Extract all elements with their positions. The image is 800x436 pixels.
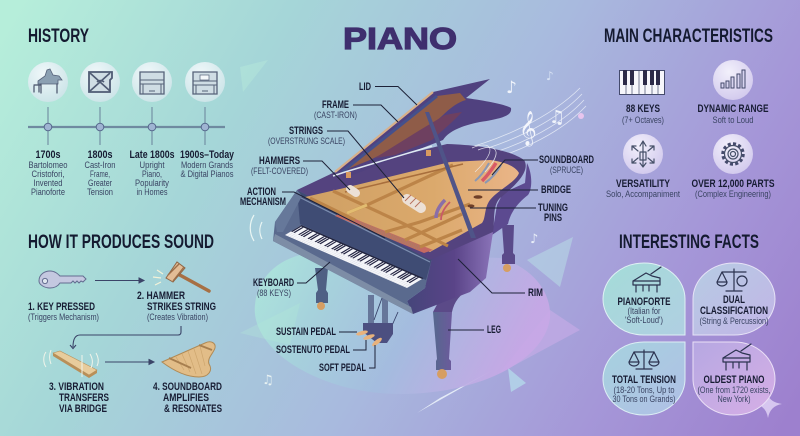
event: 1800s: Tension bbox=[87, 187, 113, 197]
music notes: 𝄞 bbox=[519, 111, 537, 147]
icon: modern piano bbox=[185, 62, 225, 102]
fact: dual classification bbox=[693, 263, 775, 335]
panel: how it produces sound bbox=[28, 231, 222, 415]
fact: total tension: (18-20 Tons, Up to bbox=[614, 385, 674, 395]
music notes: ♪ bbox=[506, 78, 517, 98]
event: late 1800s: Popularity bbox=[135, 178, 169, 188]
characteristic: dynamic range: DYNAMIC RANGE bbox=[698, 103, 768, 115]
label: strings: STRINGS bbox=[289, 125, 323, 137]
fact: oldest piano bbox=[693, 342, 775, 415]
event: late 1800s: Upright bbox=[140, 160, 165, 170]
step 3: VIA BRIDGE bbox=[59, 403, 107, 415]
label: keyboard: KEYBOARD bbox=[253, 277, 294, 289]
characteristic: over 12,000 parts: (Complex Engineering) bbox=[695, 189, 771, 199]
fact: pianoforte bbox=[603, 263, 685, 335]
panel: main characteristics bbox=[604, 25, 774, 199]
fact: pianoforte: PIANOFORTE bbox=[618, 296, 670, 308]
event: 1900s-today bbox=[180, 149, 235, 179]
label: hammers bbox=[251, 155, 350, 190]
characteristic: dynamic range: Soft to Loud bbox=[712, 115, 754, 125]
event: 1800s: Cast-Iron bbox=[84, 160, 116, 170]
event: 1800s: 1800s bbox=[88, 149, 112, 161]
characteristic: over 12,000 parts: OVER 12,000 PARTS bbox=[692, 178, 774, 190]
prop stick bbox=[425, 112, 476, 238]
event: 1700s: 1700s bbox=[36, 149, 60, 161]
event: 1900s-today: & Digital Pianos bbox=[180, 169, 234, 179]
panel: history bbox=[28, 25, 235, 197]
label: strings bbox=[268, 125, 404, 198]
interior details bbox=[310, 145, 501, 253]
event: 1900s-today: Modern Grands bbox=[181, 160, 233, 170]
label: keyboard bbox=[253, 262, 330, 298]
label: sostenuto pedal bbox=[276, 340, 366, 356]
event: 1700s: Bartolomeo bbox=[28, 160, 68, 170]
music notes: ♪ bbox=[530, 232, 538, 247]
rim bbox=[407, 232, 493, 314]
step 2: (Creates Vibration) bbox=[147, 312, 208, 322]
label: hammers: (FELT-COVERED) bbox=[251, 166, 308, 176]
icon: grand piano 1700s bbox=[28, 62, 68, 102]
step 3: 3. VIBRATION bbox=[49, 381, 104, 393]
label: soundboard: (SPRUCE) bbox=[550, 165, 583, 175]
icon: gear bbox=[713, 134, 753, 174]
label: tuning pins: PINS bbox=[544, 212, 562, 224]
label: sustain pedal: SUSTAIN PEDAL bbox=[276, 326, 336, 338]
fact: pianoforte: 'Soft-Loud') bbox=[625, 315, 663, 325]
timeline bbox=[28, 107, 225, 145]
label: rim: RIM bbox=[528, 287, 543, 299]
step 1: 1. KEY PRESSED bbox=[28, 301, 95, 313]
label: lid bbox=[359, 81, 417, 105]
rim side wing bbox=[492, 163, 531, 235]
floor platform bbox=[255, 252, 550, 394]
characteristic: 88 keys: (7+ Octaves) bbox=[622, 115, 664, 125]
label: soundboard: SOUNDBOARD bbox=[539, 154, 594, 166]
step 3: TRANSFERS bbox=[59, 392, 109, 404]
step 3 bbox=[49, 381, 109, 415]
event: late 1800s bbox=[130, 149, 174, 197]
lid bbox=[333, 79, 511, 178]
label: tuning pins bbox=[470, 202, 568, 224]
fact: total tension: TOTAL TENSION bbox=[612, 374, 676, 386]
fact: oldest piano: New York) bbox=[718, 394, 750, 404]
label: hammers: HAMMERS bbox=[259, 155, 300, 167]
step 2 bbox=[137, 290, 216, 322]
step 4: AMPLIFIES bbox=[163, 392, 209, 404]
icon: dynamic range bbox=[713, 60, 753, 100]
label: tuning pins: TUNING bbox=[538, 202, 568, 214]
label: bridge: BRIDGE bbox=[541, 184, 571, 196]
music notes: ♪ bbox=[546, 69, 554, 83]
fact: oldest piano: OLDEST PIANO bbox=[704, 374, 765, 386]
music notes bbox=[262, 69, 586, 388]
label: action mechanism: ACTION bbox=[247, 186, 276, 198]
pedal lyre bbox=[356, 295, 398, 348]
decorative triangle left bbox=[240, 303, 300, 345]
arrow bbox=[95, 278, 144, 283]
label: sostenuto pedal: SOSTENUTO PEDAL bbox=[276, 344, 350, 356]
label: strings: (OVERSTRUNG SCALE) bbox=[268, 136, 345, 146]
fact: dual classification: CLASSIFICATION bbox=[700, 305, 768, 317]
label: frame bbox=[314, 99, 398, 122]
fact: dual classification: DUAL bbox=[723, 294, 745, 306]
label: rim bbox=[458, 259, 543, 299]
label: keyboard: (88 KEYS) bbox=[257, 288, 291, 298]
event: 1900s-today: 1900s–Today bbox=[180, 149, 235, 161]
label: soft pedal bbox=[319, 345, 375, 374]
legs bbox=[315, 225, 515, 379]
fact: total tension bbox=[603, 342, 685, 415]
music notes: ♫ bbox=[549, 107, 565, 128]
label: lid: LID bbox=[359, 81, 371, 93]
event: 1700s: Invented bbox=[34, 178, 62, 188]
label: soft pedal: SOFT PEDAL bbox=[319, 362, 366, 374]
event: 1800s bbox=[84, 149, 116, 197]
event: 1800s: Greater bbox=[88, 178, 112, 188]
heading: history: HISTORY bbox=[28, 25, 89, 47]
fact: pianoforte: (Italian for bbox=[628, 306, 660, 316]
label: leg bbox=[448, 324, 501, 336]
icon: bridge bbox=[44, 350, 98, 378]
icon: cast-iron frame bbox=[80, 62, 120, 102]
characteristic: over 12,000 parts bbox=[692, 178, 774, 199]
arrow bbox=[105, 360, 154, 364]
characteristic: versatility bbox=[606, 178, 680, 199]
label: soundboard bbox=[492, 154, 594, 175]
characteristic: 88 keys: 88 KEYS bbox=[626, 103, 660, 115]
interior soundboard bbox=[305, 160, 519, 252]
step 4: & RESONATES bbox=[164, 403, 222, 415]
icon: soundboard bbox=[162, 342, 215, 377]
characteristic: versatility: Solo, Accompaniment bbox=[606, 189, 680, 199]
step 2: 2. HAMMER bbox=[137, 290, 185, 302]
label: bridge bbox=[468, 184, 571, 196]
icon: upright piano bbox=[132, 62, 172, 102]
step 4 bbox=[153, 381, 222, 415]
piano illustration bbox=[250, 79, 531, 379]
icon: hammer bbox=[153, 262, 209, 291]
fact: oldest piano: (One from 1720 exists, bbox=[698, 385, 770, 395]
characteristic: dynamic range bbox=[698, 103, 768, 125]
characteristic: versatility: VERSATILITY bbox=[616, 178, 670, 190]
case top rim bbox=[297, 144, 526, 260]
fact: total tension: 30 Tons on Grands) bbox=[612, 394, 676, 404]
decorative shapes bbox=[240, 60, 782, 418]
event: late 1800s: Late 1800s bbox=[130, 149, 174, 161]
label: frame: (CAST-IRON) bbox=[314, 110, 357, 120]
vibration arcs bbox=[250, 215, 262, 241]
event: 1700s bbox=[28, 149, 68, 197]
icon: versatility bbox=[623, 134, 663, 174]
label: action mechanism: MECHANISM bbox=[240, 196, 286, 208]
label: frame: FRAME bbox=[322, 99, 349, 111]
label: leg: LEG bbox=[487, 324, 501, 336]
icon: key bbox=[39, 271, 86, 288]
keyboard bbox=[285, 225, 424, 288]
panel: interesting facts bbox=[603, 231, 775, 415]
icon: piano keys bbox=[620, 70, 664, 94]
event: late 1800s: in Homes bbox=[136, 187, 168, 197]
step 1: (Triggers Mechanism) bbox=[28, 312, 99, 322]
event: 1800s: Frame, bbox=[90, 169, 110, 179]
arrow bbox=[70, 326, 181, 348]
heading: how it produces sound: HOW IT PRODUCES SOUND bbox=[28, 231, 214, 253]
music notes: ♫ bbox=[262, 373, 274, 388]
step 4: 4. SOUNDBOARD bbox=[153, 381, 222, 393]
event: late 1800s: Piano, bbox=[142, 169, 162, 179]
case front bbox=[273, 190, 432, 314]
step 2: STRIKES STRING bbox=[147, 301, 216, 313]
title: PIANO bbox=[343, 21, 457, 56]
event: 1700s: Pianoforte bbox=[31, 187, 65, 197]
event: 1700s: Cristofori, bbox=[32, 169, 64, 179]
fact: dual classification: (String & Percussion) bbox=[700, 316, 769, 326]
step 1 bbox=[28, 301, 99, 322]
characteristic: 88 keys bbox=[622, 103, 664, 125]
label: action mechanism bbox=[240, 186, 385, 238]
